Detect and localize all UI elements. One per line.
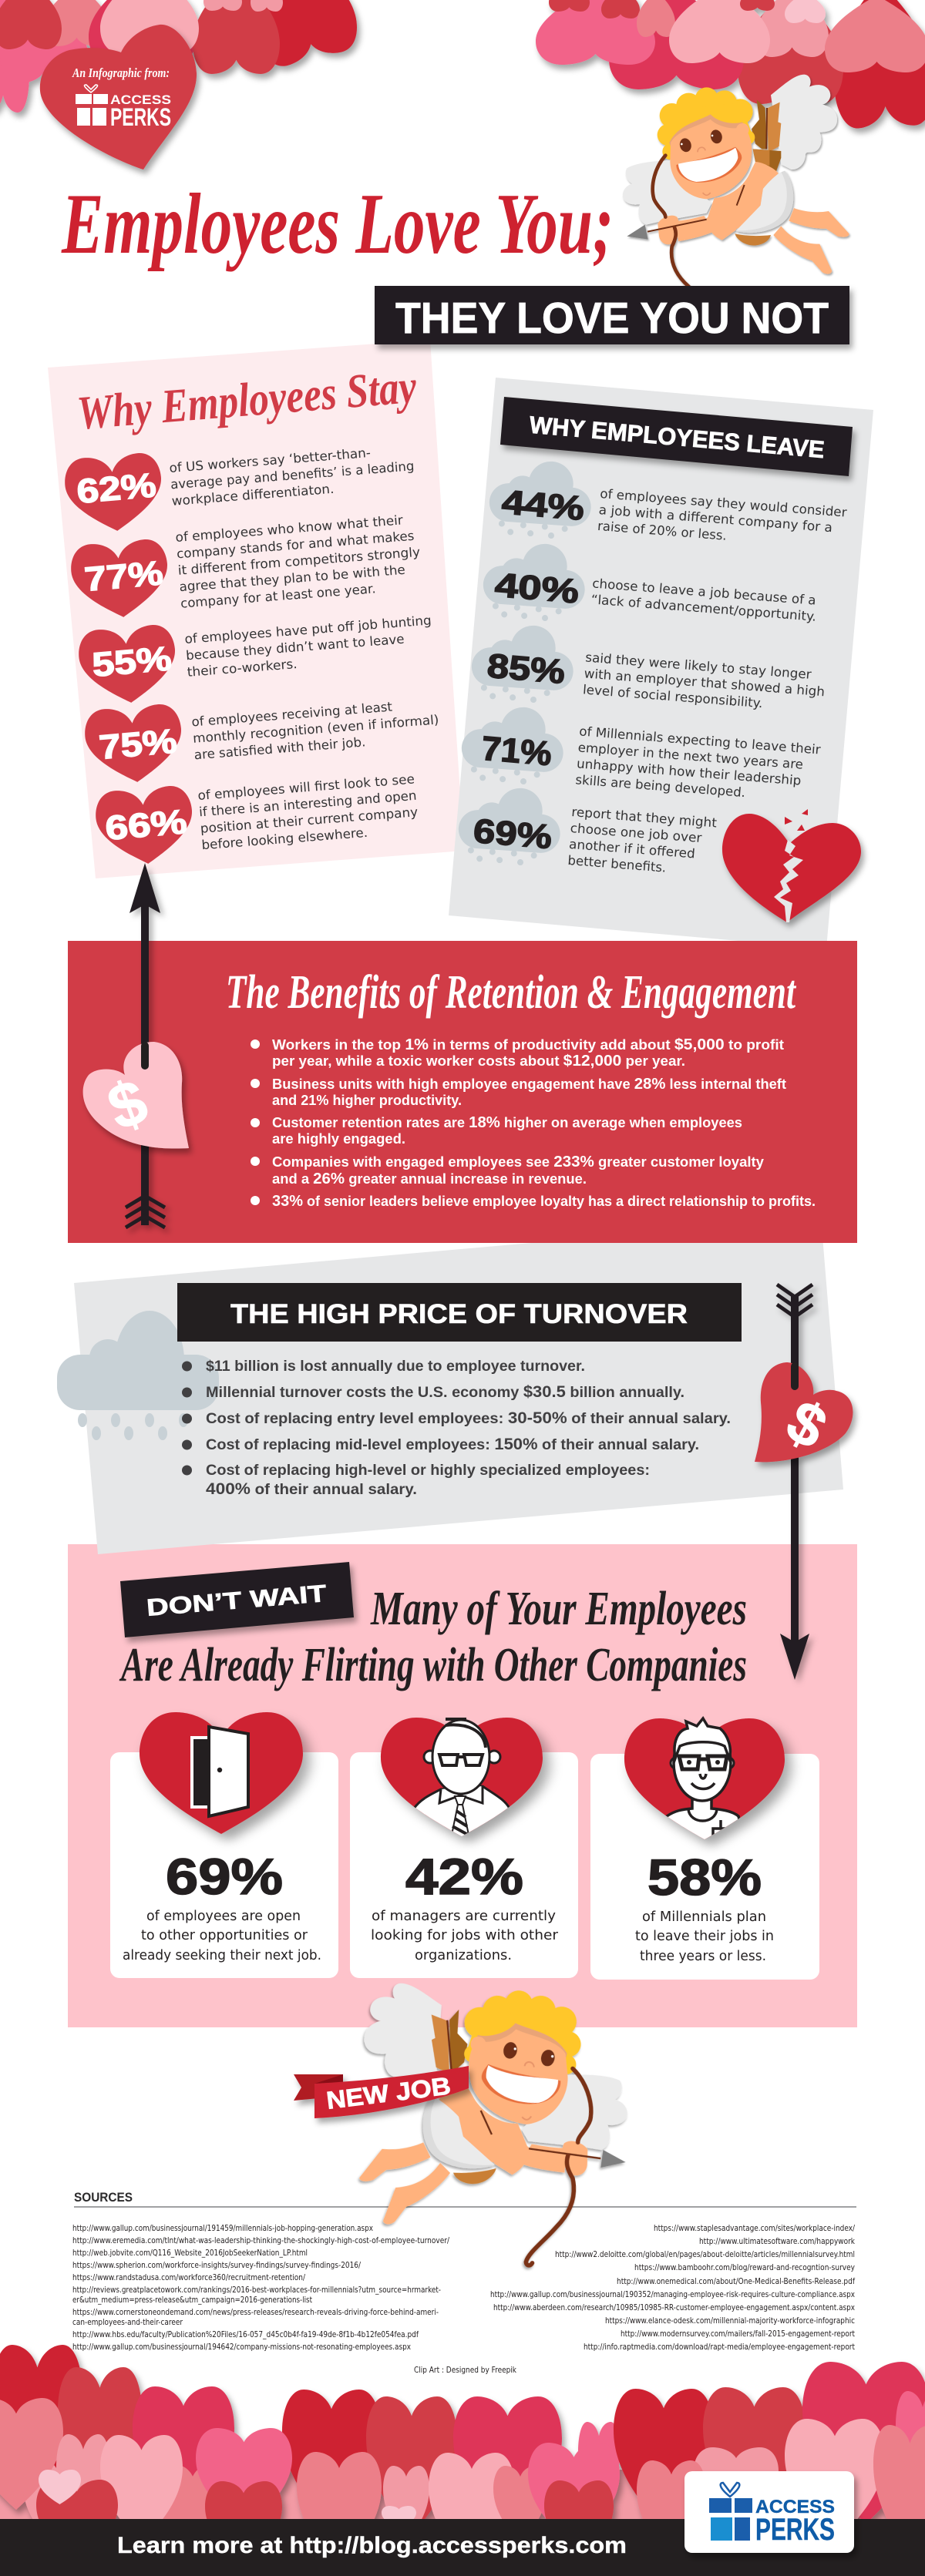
stat: 77%: 77% <box>83 554 164 599</box>
icon: heart with door <box>140 1712 303 1834</box>
banner: they love you not: THEY LOVE YOU NOT <box>395 294 829 343</box>
icon: broken heart <box>722 809 861 922</box>
panel: high price of turnover content <box>57 1283 742 1498</box>
panel: why employees stay <box>48 340 464 878</box>
stat: 66%: before looking elsewhere. <box>201 825 368 852</box>
hearts: top left cluster <box>0 0 363 113</box>
stat: 71% cloud <box>459 703 821 805</box>
stat: 75%: of employees receiving at least <box>191 699 393 729</box>
stat: 66%: of employees will first look to see <box>197 771 415 803</box>
panel: don't wait background <box>68 1544 857 2027</box>
sources: right column: http://www2.deloitte.com/global/en/pages/about-deloitte/articles/millennialsurvey.html <box>555 2250 855 2259</box>
arrow: upward with dollar heart <box>83 863 189 1228</box>
card: 42% managers <box>350 1718 578 1978</box>
stat: 77%: of employees who know what their <box>175 512 404 545</box>
stat: 44% cloud: 44% <box>500 483 586 528</box>
stat: 55%: of employees have put off job hunting <box>184 613 432 647</box>
sources: right column: http://info.raptmedia.com/download/rapt-media/employee-engagement-report <box>584 2343 855 2352</box>
bullet list: benefits: Companies with engaged employees see 233% greater customer loyalty <box>272 1154 764 1170</box>
stat: 40% cloud: 40% <box>493 566 580 611</box>
heading: many of your employees are already flirting: Many of Your Employees <box>370 1583 747 1635</box>
sources: right column: http://www.modernsurvey.com/mailers/fall-2015-engagement-report <box>621 2329 855 2339</box>
clip art credit: Clip Art : Designed by Freepik <box>414 2366 517 2375</box>
sources: right column: http://www.ultimatesoftware.com/happywork <box>699 2237 856 2246</box>
sources: right column: https://www.elance-odesk.com/millennial-majority-workforce-infographic <box>605 2316 855 2326</box>
hearts: top right cluster <box>536 0 925 129</box>
bullet list: benefits: 33% of senior leaders believe employee loyalty has a direct relationship to profits. <box>272 1193 816 1210</box>
bullet list: turnover: Millennial turnover costs the U.S. economy $30.5 billion annually. <box>206 1383 684 1401</box>
sources: left column: can-employees-and-their-career <box>72 2318 183 2327</box>
stat: 66% <box>93 771 420 868</box>
stat: 71% cloud: 71% <box>480 730 553 773</box>
icon: red dollar heart <box>755 1362 853 1462</box>
banner: the high price of turnover <box>177 1283 742 1342</box>
card: 69% open to opportunities: 69% <box>166 1848 283 1905</box>
arrow: downward with dollar heart: $ <box>776 1386 837 1462</box>
card: 42% managers: of managers are currently <box>372 1909 556 1924</box>
illustration: cupid top <box>623 75 849 317</box>
bullet list: turnover: Cost of replacing mid-level employees: 150% of their annual salary. <box>206 1436 699 1453</box>
stat: 77%: agree that they plan to be with the <box>179 563 405 594</box>
logo heart: An Infographic from Access Perks: PERKS <box>110 103 171 131</box>
bullet list: benefits: per year, while a toxic worker costs about $12,000 per year. <box>272 1053 685 1070</box>
card: 42% managers: looking for jobs with other <box>371 1928 559 1943</box>
logo heart: An Infographic from Access Perks: An Infographic from: <box>72 65 170 80</box>
stat: 44% cloud: a job with a different company for a <box>598 502 833 535</box>
card: 69% open to opportunities: of employees are open <box>146 1909 301 1924</box>
bullet list: turnover: Cost of replacing high-level or highly specialized employees: <box>206 1463 650 1479</box>
stat: 62%: of US workers say ‘better-than- <box>169 445 372 475</box>
arrow: upward with dollar heart: $ <box>99 1066 156 1144</box>
stat: 71% cloud: skills are being developed. <box>575 772 746 800</box>
bullet list: benefits: and 21% higher productivity. <box>272 1093 462 1108</box>
icon: heart with millennial <box>624 1718 785 1849</box>
card: 58% millennials: three years or less. <box>640 1949 766 1964</box>
sources: left column: https://www.randstadusa.com/workforce360/recruitment-retention/ <box>72 2273 305 2282</box>
banner: why employees leave: WHY EMPLOYEES LEAVE <box>528 411 826 463</box>
logo card: Access Perks: ACCESS <box>755 2497 835 2517</box>
stat: 69% cloud: better benefits. <box>567 853 667 875</box>
stat: 55%: their co-workers. <box>187 657 298 680</box>
bullet list: turnover <box>182 1359 731 1498</box>
stat: 77% <box>69 512 423 621</box>
card: 58% millennials: of Millennials plan <box>642 1909 766 1925</box>
sources: right column <box>490 2224 856 2352</box>
sources: right column: https://www.bamboohr.com/blog/reward-and-recogntion-survey <box>634 2263 855 2272</box>
logo card: Access Perks: PERKS <box>755 2513 835 2547</box>
bullet list: benefits: and a 26% greater annual increase in revenue. <box>272 1170 587 1187</box>
arrow: downward with dollar heart <box>755 1285 853 1680</box>
stat: 66%: 66% <box>104 803 188 848</box>
card: 69% open to opportunities: already seeking their next job. <box>123 1948 321 1963</box>
stat: 62%: 62% <box>76 466 157 511</box>
stat: 71% cloud: of Millennials expecting to leave their <box>579 724 821 757</box>
bullet list: benefits <box>251 1036 816 1210</box>
stat: 85% cloud: level of social responsibility. <box>582 682 763 710</box>
bullet list: turnover: $11 billion is lost annually due to employee turnover. <box>206 1359 585 1375</box>
stat: 69% cloud: choose one job over <box>570 821 702 845</box>
banner: don't wait: DON’T WAIT <box>146 1580 328 1621</box>
panel: high price of turnover background <box>74 1217 843 1554</box>
stat: 44% cloud <box>487 457 847 552</box>
footer strip <box>0 2519 925 2576</box>
sources: left column: http://web.jobvite.com/Q116_Website_2016JobSeekerNation_LP.html <box>72 2249 308 2258</box>
stat: 85% cloud: 85% <box>486 647 567 691</box>
illustration: cupid with new job banner <box>294 1968 637 2277</box>
stat: 77%: it different from competitors strongly <box>177 545 421 578</box>
icon: heart with manager <box>381 1718 543 1849</box>
stat: 40% cloud: “lack of advancement/opportunity. <box>590 592 817 624</box>
stat: 85% cloud: with an employer that showed a high <box>584 666 826 699</box>
sources: left column: http://www.eremedia.com/tlnt/what-was-leadership-thinking-the-shockingly-high-cost-of-employee-turnover/ <box>72 2236 449 2245</box>
stat: 75%: are satisfied with their job. <box>193 734 366 762</box>
stat: 69% cloud: report that they might <box>571 804 718 831</box>
heading: why employees stay: Why Employees Stay <box>76 361 419 440</box>
card: 42% managers: 42% <box>405 1848 523 1905</box>
sources heading: SOURCES <box>74 2190 133 2205</box>
sources: left column: http://reviews.greatplacetowork.com/rankings/2016-best-workplaces-for-millennials?utm_source=hrmarket- <box>72 2285 441 2295</box>
bullet list: benefits: Customer retention rates are 18% higher on average when employees <box>272 1114 742 1131</box>
banner: why employees leave <box>500 397 853 476</box>
icon: pink dollar heart <box>83 1042 189 1149</box>
stat: 44% cloud: of employees say they would consider <box>600 486 847 520</box>
stat: 66%: if there is an interesting and open <box>198 788 417 819</box>
card: 58% millennials: to leave their jobs in <box>635 1929 774 1944</box>
sources: right column: http://www.onemedical.com/about/One-Medical-Benefits-Release.pdf <box>617 2277 855 2286</box>
stat: 44% cloud: raise of 20% or less. <box>597 519 727 543</box>
sources: right column: https://www.staplesadvantage.com/sites/workplace-index/ <box>654 2224 855 2233</box>
card: 69% open to opportunities <box>110 1712 338 1978</box>
stat: 71% cloud: employer in the next two years are <box>577 740 804 772</box>
sources: right column: http://www.gallup.com/businessjournal/190352/managing-employee-risk-requires-culture-compliance.aspx <box>490 2290 855 2299</box>
stat: 69% cloud <box>456 784 718 878</box>
hearts: bottom field <box>0 2345 925 2568</box>
stat: 62%: average pay and benefits’ is a leading <box>170 458 415 492</box>
stat: 85% cloud <box>469 621 826 715</box>
bullet list: benefits: Business units with high employee engagement have 28% less internal theft <box>272 1076 786 1093</box>
stat: 55%: because they didn’t want to leave <box>185 632 405 663</box>
stat: 71% cloud: unhappy with how their leadership <box>576 756 802 788</box>
sources: right column: http://www.aberdeen.com/research/10985/10985-RR-customer-employee-engagement.aspx/content.aspx <box>493 2303 855 2312</box>
stat: 77%: company stands for and what makes <box>176 529 415 561</box>
title: Employees Love You;: Employees Love You; <box>61 176 614 272</box>
sources: left column: http://www.gallup.com/businessjournal/194642/company-missions-not-resonating-employees.aspx <box>72 2343 411 2352</box>
stat: 40% cloud: choose to leave a job because of a <box>592 576 816 608</box>
panel: benefits of retention and engagement <box>68 941 857 1243</box>
stat: 55%: 55% <box>91 640 173 684</box>
stat: 77%: company for at least one year. <box>180 581 376 611</box>
banner: new job <box>294 2066 469 2118</box>
bullet list: benefits: Workers in the top 1% in terms of productivity add about $5,000 to profit <box>272 1036 784 1053</box>
stat: 75%: 75% <box>98 722 178 767</box>
logo heart: An Infographic from Access Perks <box>40 25 197 170</box>
stat: 69% cloud: another if it offered <box>568 837 695 861</box>
stat: 69% cloud: 69% <box>472 812 553 856</box>
sources: left column <box>72 2224 449 2352</box>
stat: 66%: position at their current company <box>200 804 419 836</box>
stat: 55% <box>76 613 435 707</box>
sources: left column: https://www.spherion.com/workforce-insights/survey-findings/survey-findings-2016/ <box>72 2261 361 2270</box>
stat: 62% <box>62 442 416 535</box>
icon: big rain cloud <box>57 1311 219 1440</box>
card: 58% millennials: 58% <box>648 1849 762 1906</box>
stat: 75%: monthly recognition (even if informal) <box>192 712 439 746</box>
stat: 75% <box>82 696 441 786</box>
bullet list: benefits: are highly engaged. <box>272 1131 405 1147</box>
sources: left column: http://www.hbs.edu/faculty/Publication%20Files/16-057_d45c0b4f-fa19-49de-8f1b-4b12fe054fea.pdf <box>72 2330 419 2339</box>
sources: left column: http://www.gallup.com/businessjournal/191459/millennials-job-hopping-generation.aspx <box>72 2224 373 2233</box>
banner: new job: NEW JOB <box>325 2071 452 2114</box>
sources: left column: https://www.cornerstoneondemand.com/news/press-releases/research-reveals-driving-force-behind-ameri- <box>72 2308 439 2317</box>
banner: don't wait <box>120 1562 354 1637</box>
card: 58% millennials <box>590 1718 819 1980</box>
logo card: Access Perks <box>684 2471 854 2553</box>
bullet list: turnover: 400% of their annual salary. <box>206 1480 417 1498</box>
sources: left column: er&utm_medium=press-release&utm_campaign=2016-generations-list <box>72 2296 312 2305</box>
logo heart: An Infographic from Access Perks: ACCESS <box>110 92 171 107</box>
card: 69% open to opportunities: to other opportunities or <box>141 1928 308 1943</box>
heading: many of your employees are already flirting <box>119 1583 747 1691</box>
card: 42% managers: organizations. <box>415 1948 512 1963</box>
bullet list: turnover: Cost of replacing entry level employees: 30-50% of their annual salary. <box>206 1409 731 1427</box>
stat: 62%: workplace differentiaton. <box>171 482 335 509</box>
panel: why employees leave <box>449 378 873 949</box>
stat: 40% cloud <box>481 539 818 624</box>
stat: 85% cloud: said they were likely to stay longer <box>585 650 812 682</box>
banner: the high price of turnover: THE HIGH PRICE OF TURNOVER <box>230 1299 688 1329</box>
footer strip: Learn more at http://blog.accessperks.com <box>117 2533 627 2558</box>
